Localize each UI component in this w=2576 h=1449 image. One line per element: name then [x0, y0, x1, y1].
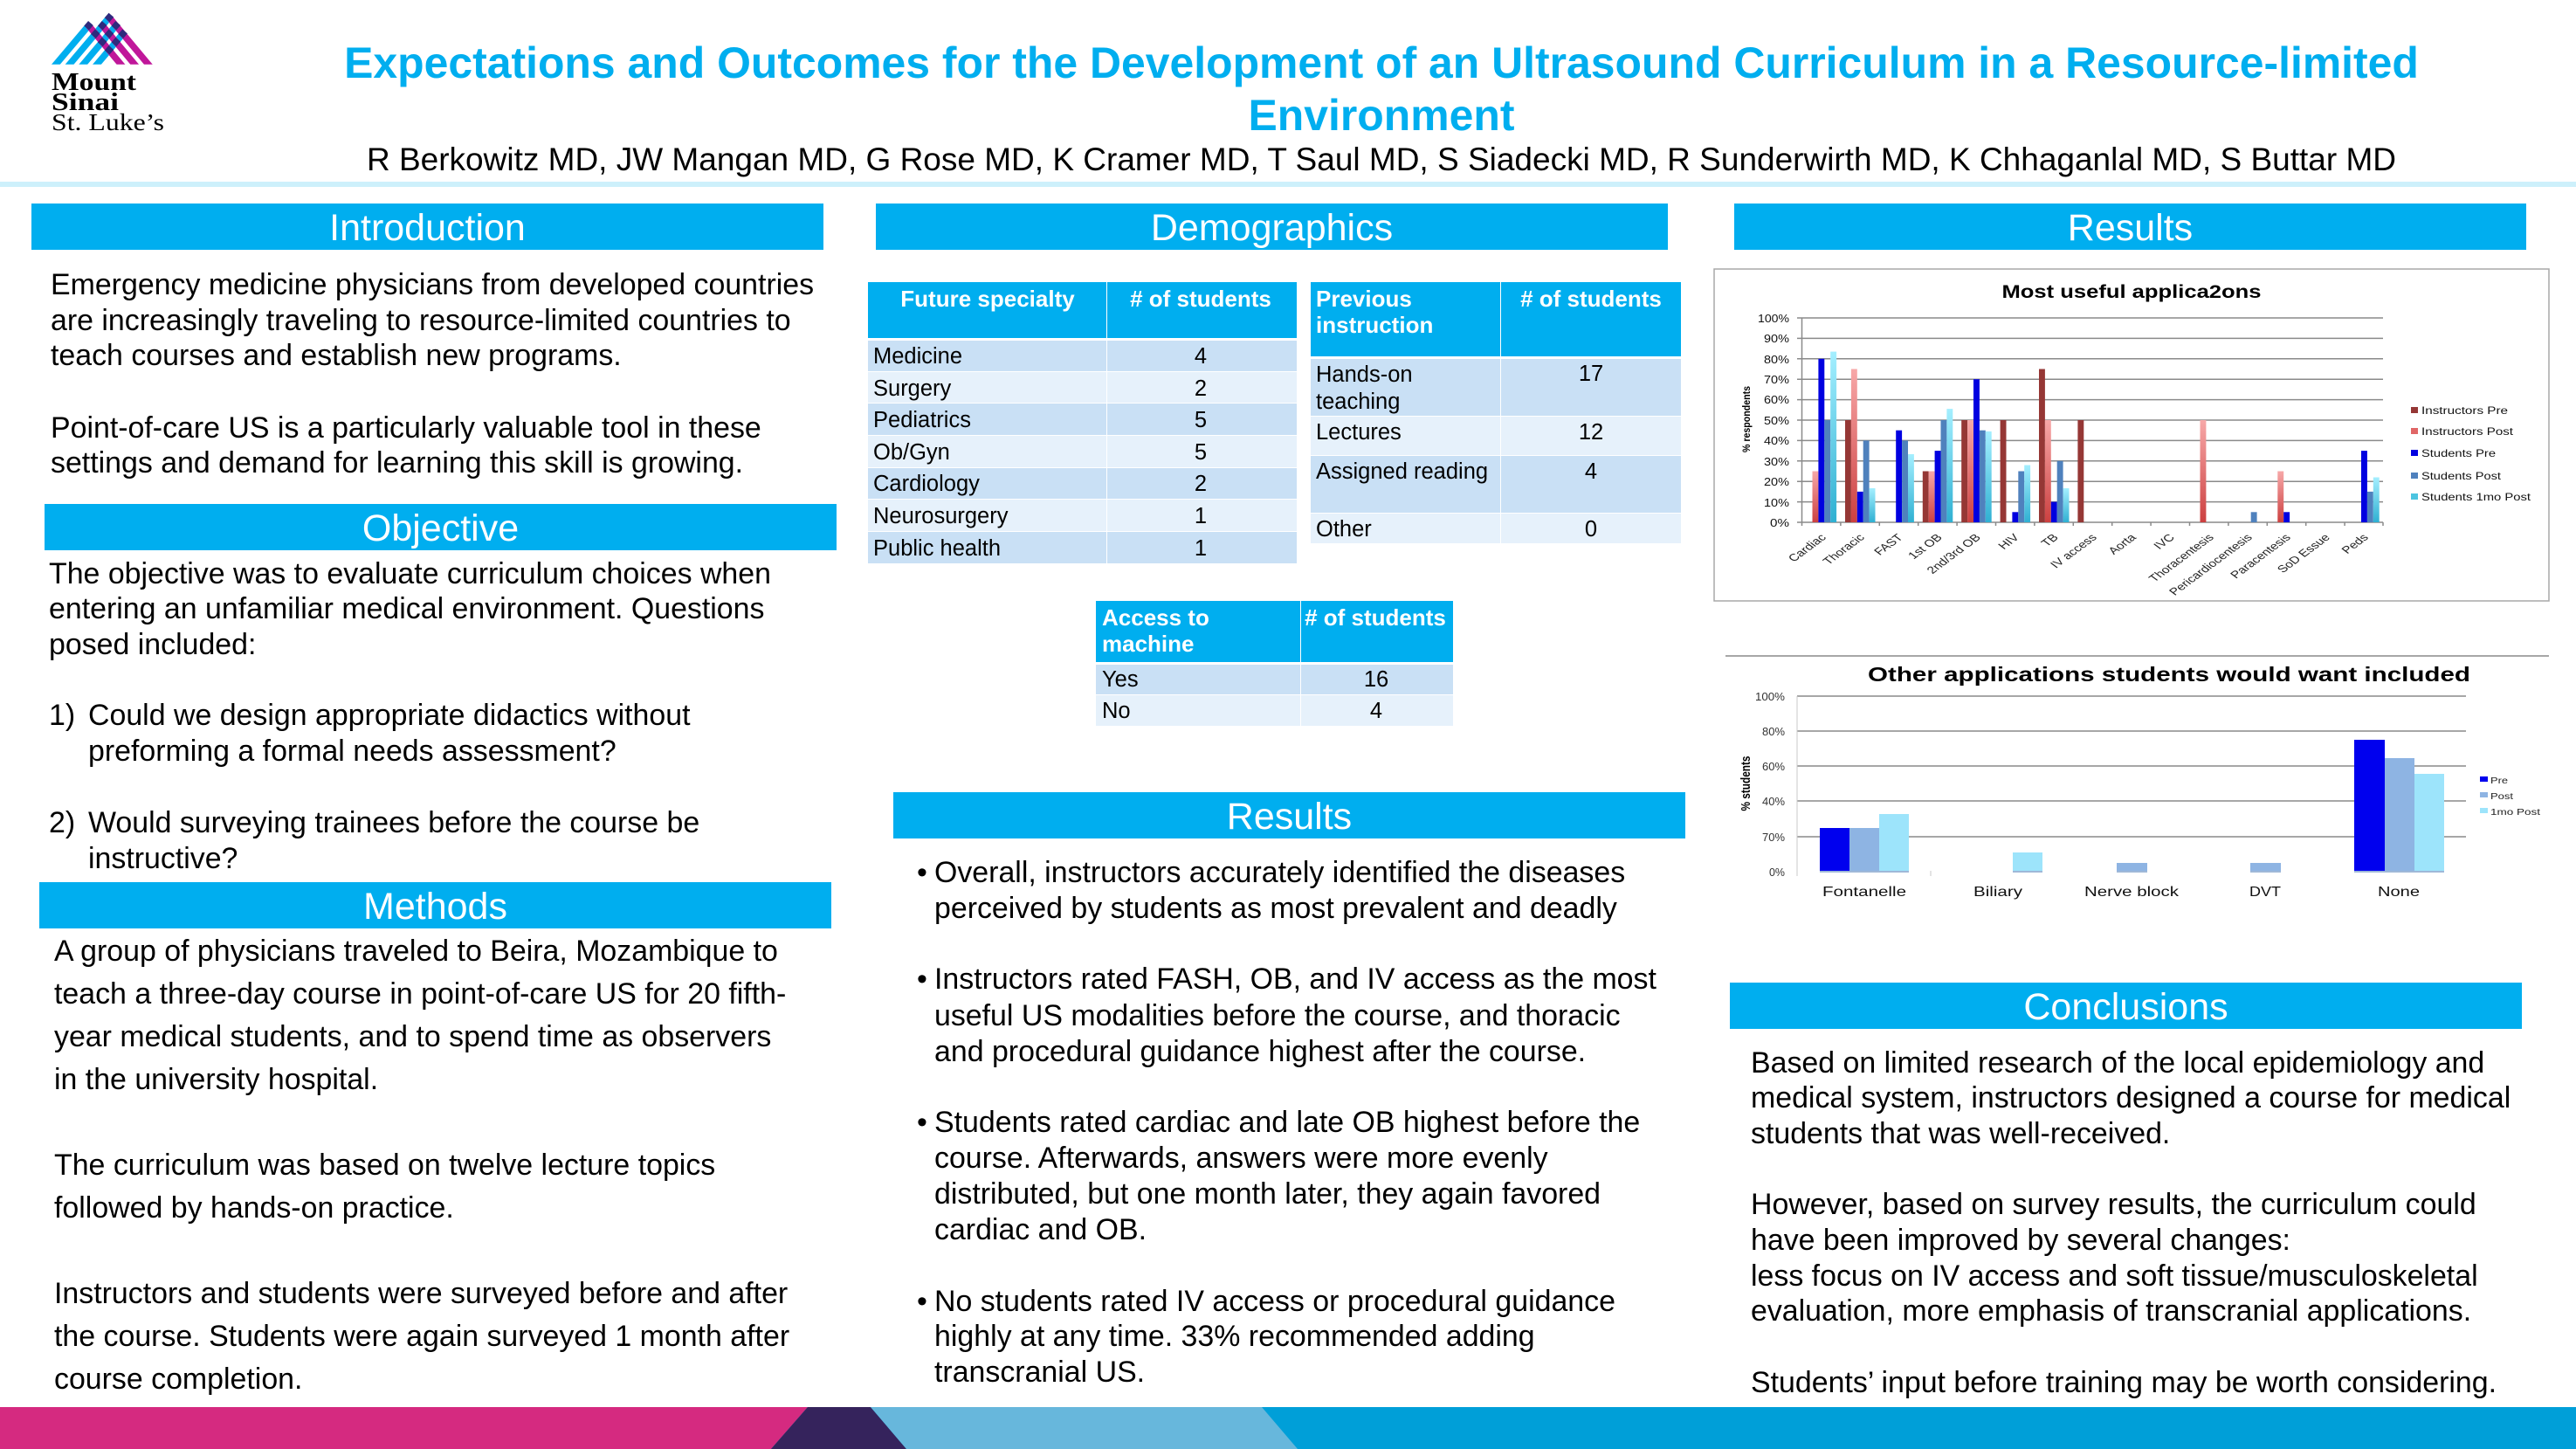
chart: most useful applications: Students Pre	[2421, 447, 2496, 459]
heading: Demographics	[876, 204, 1668, 250]
table: future specialty: 2	[1195, 472, 1207, 496]
chart: other applications students would want included: 70%	[1762, 831, 1785, 844]
table: access to machine: 4	[1370, 699, 1382, 723]
table: previous instruction: teaching	[1316, 390, 1400, 414]
text block: conclusions: Based on limited research of the local epidemiology and	[1751, 1046, 2484, 1080]
text block: objective: posed included:	[49, 628, 256, 661]
chart: most useful applications: 2nd/3rd OB	[1924, 532, 1983, 576]
text block: methods: A group of physicians traveled to Beira, Mozambique to	[54, 935, 778, 968]
chart: other applications students would want included: Biliary	[1973, 885, 2022, 900]
text block: objective	[49, 557, 771, 875]
text block: results bullets: cardiac and OB.	[934, 1213, 1147, 1246]
heading: Results (middle)	[893, 792, 1685, 838]
table: future specialty: Ob/Gyn	[873, 440, 950, 465]
heading: Conclusions	[1730, 983, 2522, 1029]
text block: results bullets: course. Afterwards, answers were more evenly	[934, 1142, 1548, 1175]
table: previous instruction: 4	[1585, 459, 1597, 484]
text block: methods: followed by hands-on practice.	[54, 1191, 454, 1225]
chart: most useful applications: 70%	[1764, 374, 1789, 386]
heading: Objective	[45, 504, 837, 550]
text block: objective: 2)	[49, 806, 75, 839]
chart: most useful applications: 0%	[1770, 517, 1789, 529]
text block: results bullets: Overall, instructors accurately identified the diseases	[934, 856, 1625, 889]
text block: conclusions	[1751, 1046, 2511, 1399]
chart: other applications students would want included: 100%	[1755, 691, 1785, 703]
chart: other applications students would want included: Other applications students would want included	[1868, 663, 2470, 686]
chart: most useful applications: Peds	[2338, 532, 2372, 555]
text block: results bullets: highly at any time. 33% recommended adding	[934, 1320, 1535, 1353]
table: future specialty: 5	[1195, 440, 1207, 465]
chart: most useful applications: 50%	[1764, 415, 1789, 427]
text block: methods: year medical students, and to spend time as observers	[54, 1020, 771, 1053]
chart: other applications students would want included: DVT	[2249, 885, 2281, 900]
table: access to machine: No	[1102, 699, 1131, 723]
text block: introduction: Point-of-care US is a particularly valuable tool in these	[51, 411, 761, 445]
table: future specialty: # of students	[1130, 286, 1271, 312]
table: future specialty: Surgery	[873, 376, 951, 401]
table: previous instruction: Assigned reading	[1316, 459, 1488, 484]
heading: Introduction: Introduction	[329, 207, 526, 249]
chart: most useful applications: 100%	[1758, 313, 1789, 325]
text block: methods: Instructors and students were surveyed before and after	[54, 1277, 788, 1310]
text block: results bullets: and procedural guidance highest after the course.	[934, 1035, 1586, 1068]
table: previous instruction	[1311, 282, 1681, 543]
chart: most useful applications: % respondents	[1740, 386, 1753, 452]
chart: most useful applications: Instructors Post	[2421, 425, 2514, 438]
chart: most useful applications	[1713, 268, 2550, 602]
table: access to machine: 16	[1364, 667, 1388, 692]
chart: most useful applications: 40%	[1764, 435, 1789, 447]
table: future specialty: 5	[1195, 408, 1207, 432]
chart: other applications students would want included: Post	[2490, 791, 2513, 802]
text block: objective: The objective was to evaluate curriculum choices when	[49, 557, 771, 590]
heading: Objective: Objective	[362, 507, 519, 549]
text block: methods: the course. Students were again surveyed 1 month after	[54, 1320, 789, 1353]
logo: Mount Sinai St. Luke's: Mount	[52, 68, 136, 96]
chart: other applications students would want included: 60%	[1762, 761, 1785, 773]
table: access to machine: Access to	[1102, 604, 1209, 631]
logo: Mount Sinai St. Luke's: St. Luke’s	[52, 109, 164, 135]
table: previous instruction: Previous	[1316, 286, 1412, 312]
authors: R Berkowitz MD, JW Mangan MD, G Rose MD, K Cramer MD, T Saul MD, S Siadecki MD, R Sunderwirth MD, K Chhaganlal MD, S Buttar MD	[367, 141, 2396, 177]
table: previous instruction: 0	[1585, 517, 1597, 542]
heading: Methods	[39, 882, 831, 928]
header divider band	[0, 182, 2576, 187]
text block: methods: course completion.	[54, 1363, 302, 1396]
table: previous instruction: # of students	[1520, 286, 1662, 312]
text block: methods: in the university hospital.	[54, 1063, 378, 1096]
text block: conclusions: less focus on IV access and soft tissue/musculoskeletal	[1751, 1259, 2478, 1293]
chart: other applications students would want included: 1mo Post	[2490, 807, 2540, 818]
text block: introduction	[51, 268, 814, 480]
text block: results bullets: distributed, but one month later, they again favored	[934, 1177, 1601, 1211]
text block: results bullets: useful US modalities before the course, and thoracic	[934, 999, 1621, 1032]
text block: conclusions: evaluation, more emphasis of transcranial applications.	[1751, 1294, 2471, 1328]
text block: results bullets: Instructors rated FASH, OB, and IV access as the most	[934, 963, 1656, 996]
chart: most useful applications: HIV	[1995, 531, 2022, 551]
chart: most useful applications: Instructors Pre	[2421, 404, 2508, 417]
chart: other applications students would want included: Fontanelle	[1822, 885, 1906, 900]
logo: Mount Sinai St. Luke's	[51, 12, 164, 135]
table: future specialty: Pediatrics	[873, 408, 971, 432]
chart: most useful applications: TB	[2038, 532, 2061, 549]
chart: most useful applications: Pericardiocentesis	[2166, 532, 2256, 597]
chart: most useful applications: SoD Essue	[2275, 532, 2332, 575]
chart: most useful applications: Students Post	[2421, 470, 2502, 482]
table: future specialty: 1	[1195, 536, 1207, 561]
table: previous instruction: Lectures	[1316, 420, 1402, 445]
table: future specialty: Medicine	[873, 344, 962, 369]
text block: results bullets: •	[917, 1106, 927, 1139]
table: previous instruction: 17	[1579, 362, 1603, 386]
text block: methods: teach a three-day course in point-of-care US for 20 fifth-	[54, 977, 786, 1011]
text block: introduction: are increasingly traveling to resource-limited countries to	[51, 304, 791, 337]
chart: other applications students would want included: None	[2378, 885, 2420, 900]
chart: other applications students would want included: 0%	[1769, 866, 1785, 879]
footer band	[0, 1407, 2576, 1449]
table: previous instruction: Hands-on	[1316, 362, 1413, 387]
text block: objective: instructive?	[88, 842, 238, 875]
chart: most useful applications: 60%	[1764, 394, 1789, 406]
text block: results bullets: •	[917, 856, 927, 889]
table: future specialty: 2	[1195, 376, 1207, 401]
heading: Results (middle): Results	[1227, 796, 1352, 838]
chart: other applications students would want included	[1725, 655, 2549, 900]
table: previous instruction: 12	[1579, 420, 1603, 445]
chart: most useful applications: 10%	[1764, 497, 1789, 509]
table: previous instruction: instruction	[1316, 312, 1433, 338]
chart: other applications students would want included: Nerve block	[2084, 885, 2180, 900]
text block: methods	[54, 935, 789, 1396]
text block: methods: The curriculum was based on twelve lecture topics	[54, 1149, 715, 1182]
text block: introduction: settings and demand for learning this skill is growing.	[51, 446, 743, 480]
chart: other applications students would want included: Pre	[2490, 776, 2508, 786]
chart: most useful applications: Thoracic	[1820, 532, 1868, 567]
text block: conclusions: However, based on survey results, the curriculum could	[1751, 1188, 2476, 1221]
chart: most useful applications: IVC	[2151, 532, 2178, 551]
table: future specialty	[868, 282, 1297, 563]
heading: Conclusions: Conclusions	[2023, 986, 2228, 1028]
table: future specialty: Public health	[873, 536, 1001, 561]
chart: most useful applications: 20%	[1764, 476, 1789, 488]
text block: conclusions: have been improved by several changes:	[1751, 1224, 2290, 1257]
chart: most useful applications: 90%	[1764, 333, 1789, 345]
chart: most useful applications: Most useful applica2ons	[2001, 282, 2262, 302]
table: future specialty: Cardiology	[873, 472, 980, 496]
text block: conclusions: students that was well-received.	[1751, 1117, 2170, 1150]
chart: most useful applications: Paracentesis	[2228, 532, 2294, 581]
chart: most useful applications: Thoracentesis	[2146, 532, 2217, 584]
text block: introduction: teach courses and establish new programs.	[51, 339, 622, 372]
text block: results bullets: •	[917, 963, 927, 996]
chart: other applications students would want included: 80%	[1762, 726, 1785, 738]
text block: conclusions: medical system, instructors designed a course for medical	[1751, 1081, 2511, 1114]
table: access to machine	[1096, 601, 1453, 726]
chart: most useful applications: 1st OB	[1905, 532, 1945, 562]
chart: most useful applications: Aorta	[2105, 532, 2139, 556]
chart: most useful applications: Cardiac	[1786, 532, 1829, 564]
title	[344, 38, 2419, 140]
heading: Results (right): Results	[2068, 207, 2193, 249]
text block: results bullets: Students rated cardiac and late OB highest before the	[934, 1106, 1640, 1139]
table: access to machine: machine	[1102, 631, 1195, 657]
heading: Results (right)	[1734, 204, 2526, 250]
logo: Mount Sinai St. Luke's: Sinai	[52, 88, 119, 116]
chart: most useful applications: 30%	[1764, 456, 1789, 468]
chart: other applications students would want included: % students	[1739, 756, 1753, 811]
table: future specialty: Future specialty	[900, 286, 1075, 312]
text block: results bullets: perceived by students as most prevalent and deadly	[934, 892, 1617, 925]
text block: objective: preforming a formal needs assessment?	[88, 735, 616, 768]
chart: most useful applications: Students 1mo Post	[2421, 491, 2531, 503]
chart: most useful applications: 80%	[1764, 354, 1789, 366]
table: future specialty: Neurosurgery	[873, 504, 1008, 528]
text block: results bullets	[917, 856, 1656, 1389]
text block: objective: Would surveying trainees before the course be	[88, 806, 699, 839]
text block: results bullets: transcranial US.	[934, 1356, 1145, 1389]
title: Expectations and Outcomes for the Development of an Ultrasound Curriculum in a Resource-limited	[344, 38, 2419, 87]
text block: conclusions: Students’ input before training may be worth considering.	[1751, 1366, 2497, 1399]
table: future specialty: 4	[1195, 344, 1207, 369]
text block: introduction: Emergency medicine physicians from developed countries	[51, 268, 814, 301]
title: Environment	[1249, 91, 1514, 140]
chart: other applications students would want included: 40%	[1762, 796, 1785, 808]
table: future specialty: 1	[1195, 504, 1207, 528]
table: previous instruction: Other	[1316, 517, 1372, 542]
heading: Demographics: Demographics	[1151, 207, 1393, 249]
chart: most useful applications: FAST	[1871, 531, 1906, 557]
text block: objective: Could we design appropriate didactics without	[88, 699, 691, 732]
heading: Methods: Methods	[363, 886, 507, 928]
table: access to machine: Yes	[1102, 667, 1139, 692]
text block: objective: 1)	[49, 699, 75, 732]
heading: Introduction	[31, 204, 823, 250]
table: access to machine: # of students	[1305, 604, 1446, 631]
chart: most useful applications: IV access	[2048, 532, 2100, 570]
text block: results bullets: •	[917, 1285, 927, 1318]
text block: objective: entering an unfamiliar medical environment. Questions	[49, 592, 764, 625]
text block: results bullets: No students rated IV access or procedural guidance	[934, 1285, 1615, 1318]
